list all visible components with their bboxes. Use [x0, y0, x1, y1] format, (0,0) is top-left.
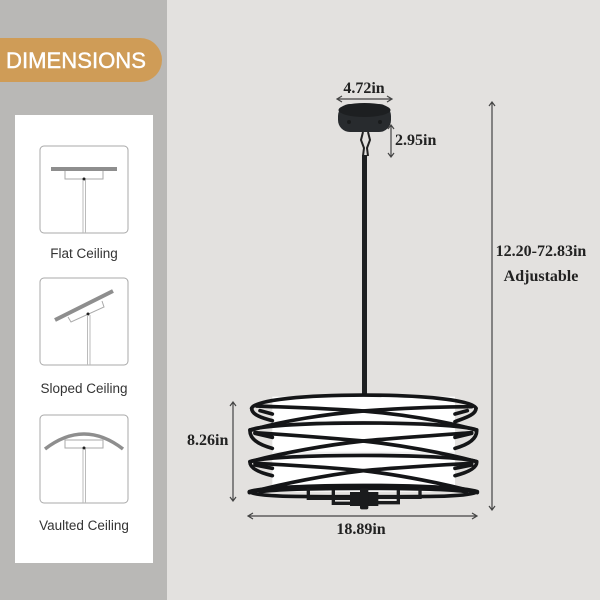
vaulted ceiling icon — [40, 415, 128, 503]
rod — [362, 155, 367, 396]
band 1 — [252, 395, 476, 430]
panel: ceiling types — [15, 115, 153, 563]
dimension: total height: Adjustable — [504, 268, 578, 285]
band 2 — [250, 423, 477, 462]
label: sloped ceiling: Sloped Ceiling — [40, 381, 128, 396]
light cluster — [308, 488, 420, 509]
dimension: lamp width — [248, 513, 477, 538]
dimension: lamp height: 8.26in — [187, 432, 228, 449]
drum shade — [272, 397, 455, 492]
dimensions badge — [0, 38, 162, 82]
band 4 — [249, 485, 477, 497]
dimension: canopy height: 2.95in — [395, 132, 436, 149]
left sidebar — [0, 0, 167, 600]
dimensions badge: DIMENSIONS — [6, 48, 146, 73]
canopy — [338, 103, 391, 156]
dimension: total height — [489, 102, 586, 510]
label: vaulted ceiling: Vaulted Ceiling — [39, 518, 129, 533]
sloped ceiling icon — [40, 278, 128, 365]
dimension: canopy width — [337, 80, 392, 102]
label: flat ceiling: Flat Ceiling — [50, 246, 118, 261]
pendant lamp — [249, 103, 477, 509]
dimension: canopy width: 4.72in — [343, 80, 385, 97]
flat ceiling icon — [40, 146, 128, 233]
band 3 — [249, 455, 477, 493]
dimension: lamp height — [187, 402, 236, 501]
dimension: lamp width: 18.89in — [336, 521, 386, 538]
dimension: canopy height — [388, 125, 436, 157]
dimension: total height: 12.20-72.83in — [496, 243, 586, 260]
metal bands — [249, 395, 477, 497]
